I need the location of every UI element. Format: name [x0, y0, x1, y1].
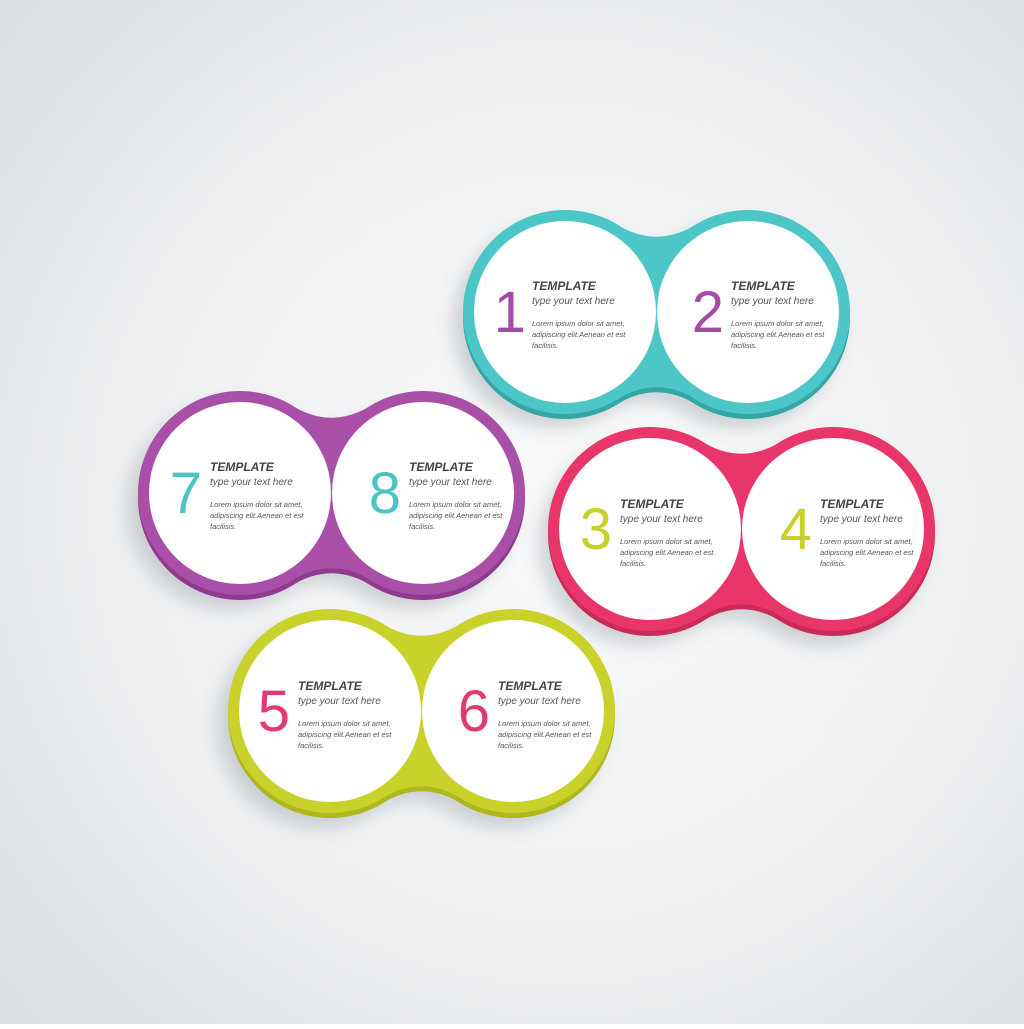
step 3	[580, 497, 714, 568]
step 1: 1	[494, 280, 526, 345]
step 1: type your text here	[532, 296, 615, 307]
step 6: type your text here	[498, 696, 581, 707]
shape: teal 1-2	[453, 210, 850, 428]
step 5: type your text here	[298, 696, 381, 707]
step 3: type your text here	[620, 514, 703, 525]
step 1: adipiscing elit.Aenean et est	[532, 330, 626, 339]
step 5: adipiscing elit.Aenean et est	[298, 730, 392, 739]
step 5	[258, 679, 392, 750]
step 8: adipiscing elit.Aenean et est	[409, 511, 503, 520]
step 2: adipiscing elit.Aenean et est	[731, 330, 825, 339]
shape: yellow 5-6	[218, 609, 615, 827]
step 2: TEMPLATE	[731, 279, 796, 293]
step 7: adipiscing elit.Aenean et est	[210, 511, 304, 520]
step 1	[494, 279, 626, 350]
step 2: type your text here	[731, 296, 814, 307]
step 7: facilisis.	[210, 522, 236, 531]
shape: red 3-4	[538, 427, 935, 645]
step 8: 8	[369, 461, 401, 526]
step 8: Lorem ipsum dolor sit amet,	[409, 500, 502, 509]
step 5: TEMPLATE	[298, 679, 363, 693]
step 3: 3	[580, 497, 612, 562]
step 7	[170, 460, 304, 531]
step 3: TEMPLATE	[620, 497, 685, 511]
step 5: 5	[258, 679, 290, 744]
step 2: facilisis.	[731, 341, 757, 350]
step 4: Lorem ipsum dolor sit amet,	[820, 537, 913, 546]
step 7: type your text here	[210, 477, 293, 488]
step 4: adipiscing elit.Aenean et est	[820, 548, 914, 557]
step 8	[369, 460, 503, 531]
step 2: 2	[692, 280, 724, 345]
step 5: Lorem ipsum dolor sit amet,	[298, 719, 391, 728]
step 3: facilisis.	[620, 559, 646, 568]
step 7: 7	[170, 461, 202, 526]
step 3: Lorem ipsum dolor sit amet,	[620, 537, 713, 546]
step 1: facilisis.	[532, 341, 558, 350]
step 6: Lorem ipsum dolor sit amet,	[498, 719, 591, 728]
step 4: facilisis.	[820, 559, 846, 568]
step 2	[692, 279, 825, 350]
step 8: TEMPLATE	[409, 460, 474, 474]
step 4: 4	[780, 497, 812, 562]
step 8: type your text here	[409, 477, 492, 488]
step 7: TEMPLATE	[210, 460, 275, 474]
step 1: TEMPLATE	[532, 279, 597, 293]
step 6: 6	[458, 679, 490, 744]
shape: purple 7-8	[128, 391, 525, 609]
step 2: Lorem ipsum dolor sit amet,	[731, 319, 824, 328]
step 6: TEMPLATE	[498, 679, 563, 693]
step 4: TEMPLATE	[820, 497, 885, 511]
step 1: Lorem ipsum dolor sit amet,	[532, 319, 625, 328]
step 5: facilisis.	[298, 741, 324, 750]
step 6: facilisis.	[498, 741, 524, 750]
step 8: facilisis.	[409, 522, 435, 531]
step 4	[780, 497, 914, 568]
step 6	[458, 679, 592, 750]
step 6: adipiscing elit.Aenean et est	[498, 730, 592, 739]
step 4: type your text here	[820, 514, 903, 525]
step 7: Lorem ipsum dolor sit amet,	[210, 500, 303, 509]
step 3: adipiscing elit.Aenean et est	[620, 548, 714, 557]
